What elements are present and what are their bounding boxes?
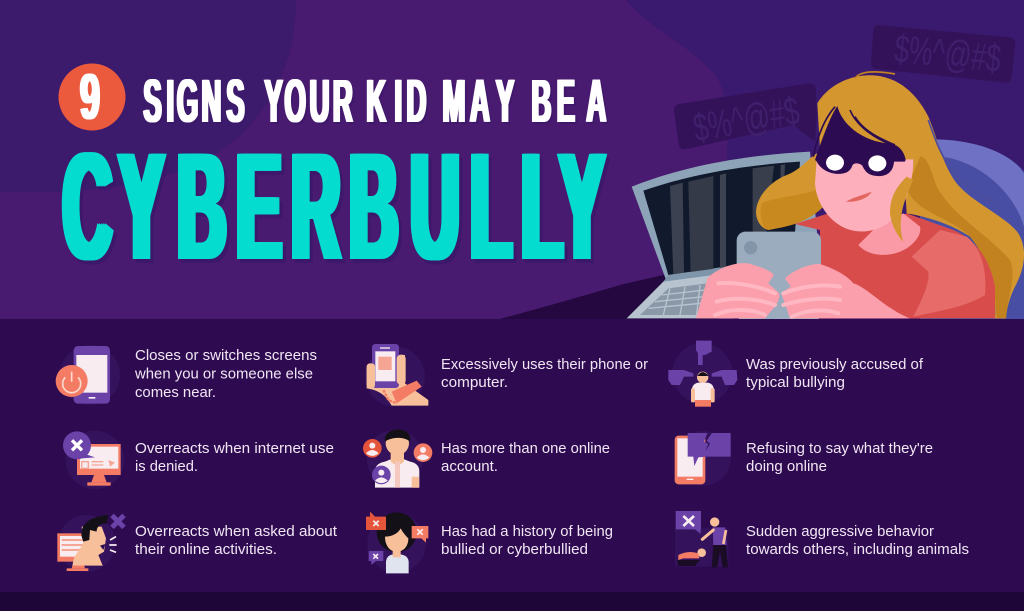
heading: signs your kid may be a: SIGNS YOUR KID MAY BE A xyxy=(142,68,605,136)
text: when you or someone else xyxy=(134,366,313,382)
icon: monitor with x bubble xyxy=(63,431,124,489)
heading: signs your kid may be a: SIGNS YOUR KID MAY BE A xyxy=(145,68,608,136)
text: Was previously accused of xyxy=(746,357,924,373)
text: Refusing to say what they're xyxy=(746,441,933,457)
text xyxy=(134,348,317,401)
text xyxy=(746,357,924,391)
chair xyxy=(920,139,1024,320)
text: Sudden aggressive behavior xyxy=(746,524,934,540)
text: doing online xyxy=(746,459,827,475)
dark floor xyxy=(620,273,720,320)
heading: cyberbully: CYBERBULLY xyxy=(65,122,606,293)
speech bubble left xyxy=(674,83,817,151)
icon: shouting person at monitor xyxy=(57,515,124,572)
text xyxy=(135,524,337,558)
text: Excessively uses their phone or xyxy=(441,357,648,373)
badge: number 9: 9 xyxy=(82,62,101,134)
mouth xyxy=(846,192,872,202)
text: Closes or switches screens xyxy=(135,348,317,364)
badge: number 9: 9 xyxy=(78,62,98,134)
glasses lenses xyxy=(826,155,886,171)
speech bubble left: $%^@#$ xyxy=(690,89,803,151)
item: more than one account xyxy=(363,429,610,488)
hands xyxy=(696,263,910,318)
panel: signs list xyxy=(0,319,1024,611)
item: closes or switches screens xyxy=(56,345,317,405)
text xyxy=(746,524,969,558)
item: refusing to say xyxy=(675,431,933,486)
icon: aggressive person over victim xyxy=(675,511,728,567)
text: Has had a history of being xyxy=(441,524,613,540)
text xyxy=(135,441,334,475)
heading: signs your kid may be a: SIGNS YOUR KID MAY BE A xyxy=(143,68,606,136)
text: Overreacts when asked about xyxy=(135,524,337,540)
text xyxy=(441,357,648,391)
icon: phone power button xyxy=(56,345,120,405)
illustration: girl with phone and laptop xyxy=(620,25,1024,322)
badge: number 9: 9 xyxy=(80,62,100,134)
text: account. xyxy=(441,459,498,475)
item: sudden aggressive behavior xyxy=(675,511,969,567)
text: is denied. xyxy=(135,459,198,475)
text: Overreacts when internet use xyxy=(135,441,334,457)
heading: signs your kid may be a: SIGNS YOUR KID MAY BE A xyxy=(146,70,609,138)
face and neck xyxy=(858,213,920,255)
phone xyxy=(737,232,821,322)
item: excessively uses phone xyxy=(365,344,648,407)
shirt xyxy=(795,213,995,318)
text: towards others, including animals xyxy=(746,542,969,558)
heading: cyberbully: CYBERBULLY xyxy=(66,126,607,297)
item: overreacts when asked xyxy=(57,515,337,572)
icon: hand chained to phone xyxy=(365,344,428,407)
item: history of being bullied xyxy=(366,512,613,573)
icon: phone with broken bubble xyxy=(675,431,731,486)
title xyxy=(58,62,611,297)
item: accused of bullying xyxy=(668,341,924,407)
text: bullied or cyberbullied xyxy=(441,542,588,558)
hair xyxy=(756,75,1024,318)
text: comes near. xyxy=(135,385,216,401)
laptop xyxy=(627,152,820,318)
icon: person with account badges xyxy=(363,429,432,488)
text xyxy=(441,441,610,475)
heading: cyberbully: CYBERBULLY xyxy=(61,122,602,293)
heading: cyberbully: CYBERBULLY xyxy=(70,126,611,297)
text xyxy=(441,524,613,558)
heading: cyberbully: CYBERBULLY xyxy=(67,122,608,293)
heading: cyberbully: CYBERBULLY xyxy=(62,126,603,297)
text: their online activities. xyxy=(135,542,277,558)
hair strands xyxy=(813,107,905,161)
heading: cyberbully: CYBERBULLY xyxy=(59,122,600,293)
text xyxy=(746,441,933,475)
icon: girl with x bubbles xyxy=(366,512,428,573)
text: computer. xyxy=(441,375,508,391)
heading: signs your kid may be a: SIGNS YOUR KID MAY BE A xyxy=(144,70,607,138)
badge: number 9 xyxy=(58,62,126,134)
heading: cyberbully: CYBERBULLY xyxy=(63,122,604,293)
item: overreacts when internet denied xyxy=(63,431,334,489)
icon: boy with pointing hands xyxy=(668,341,737,407)
text: typical bullying xyxy=(746,375,845,391)
mask xyxy=(815,106,905,176)
text: Has more than one online xyxy=(441,441,610,457)
